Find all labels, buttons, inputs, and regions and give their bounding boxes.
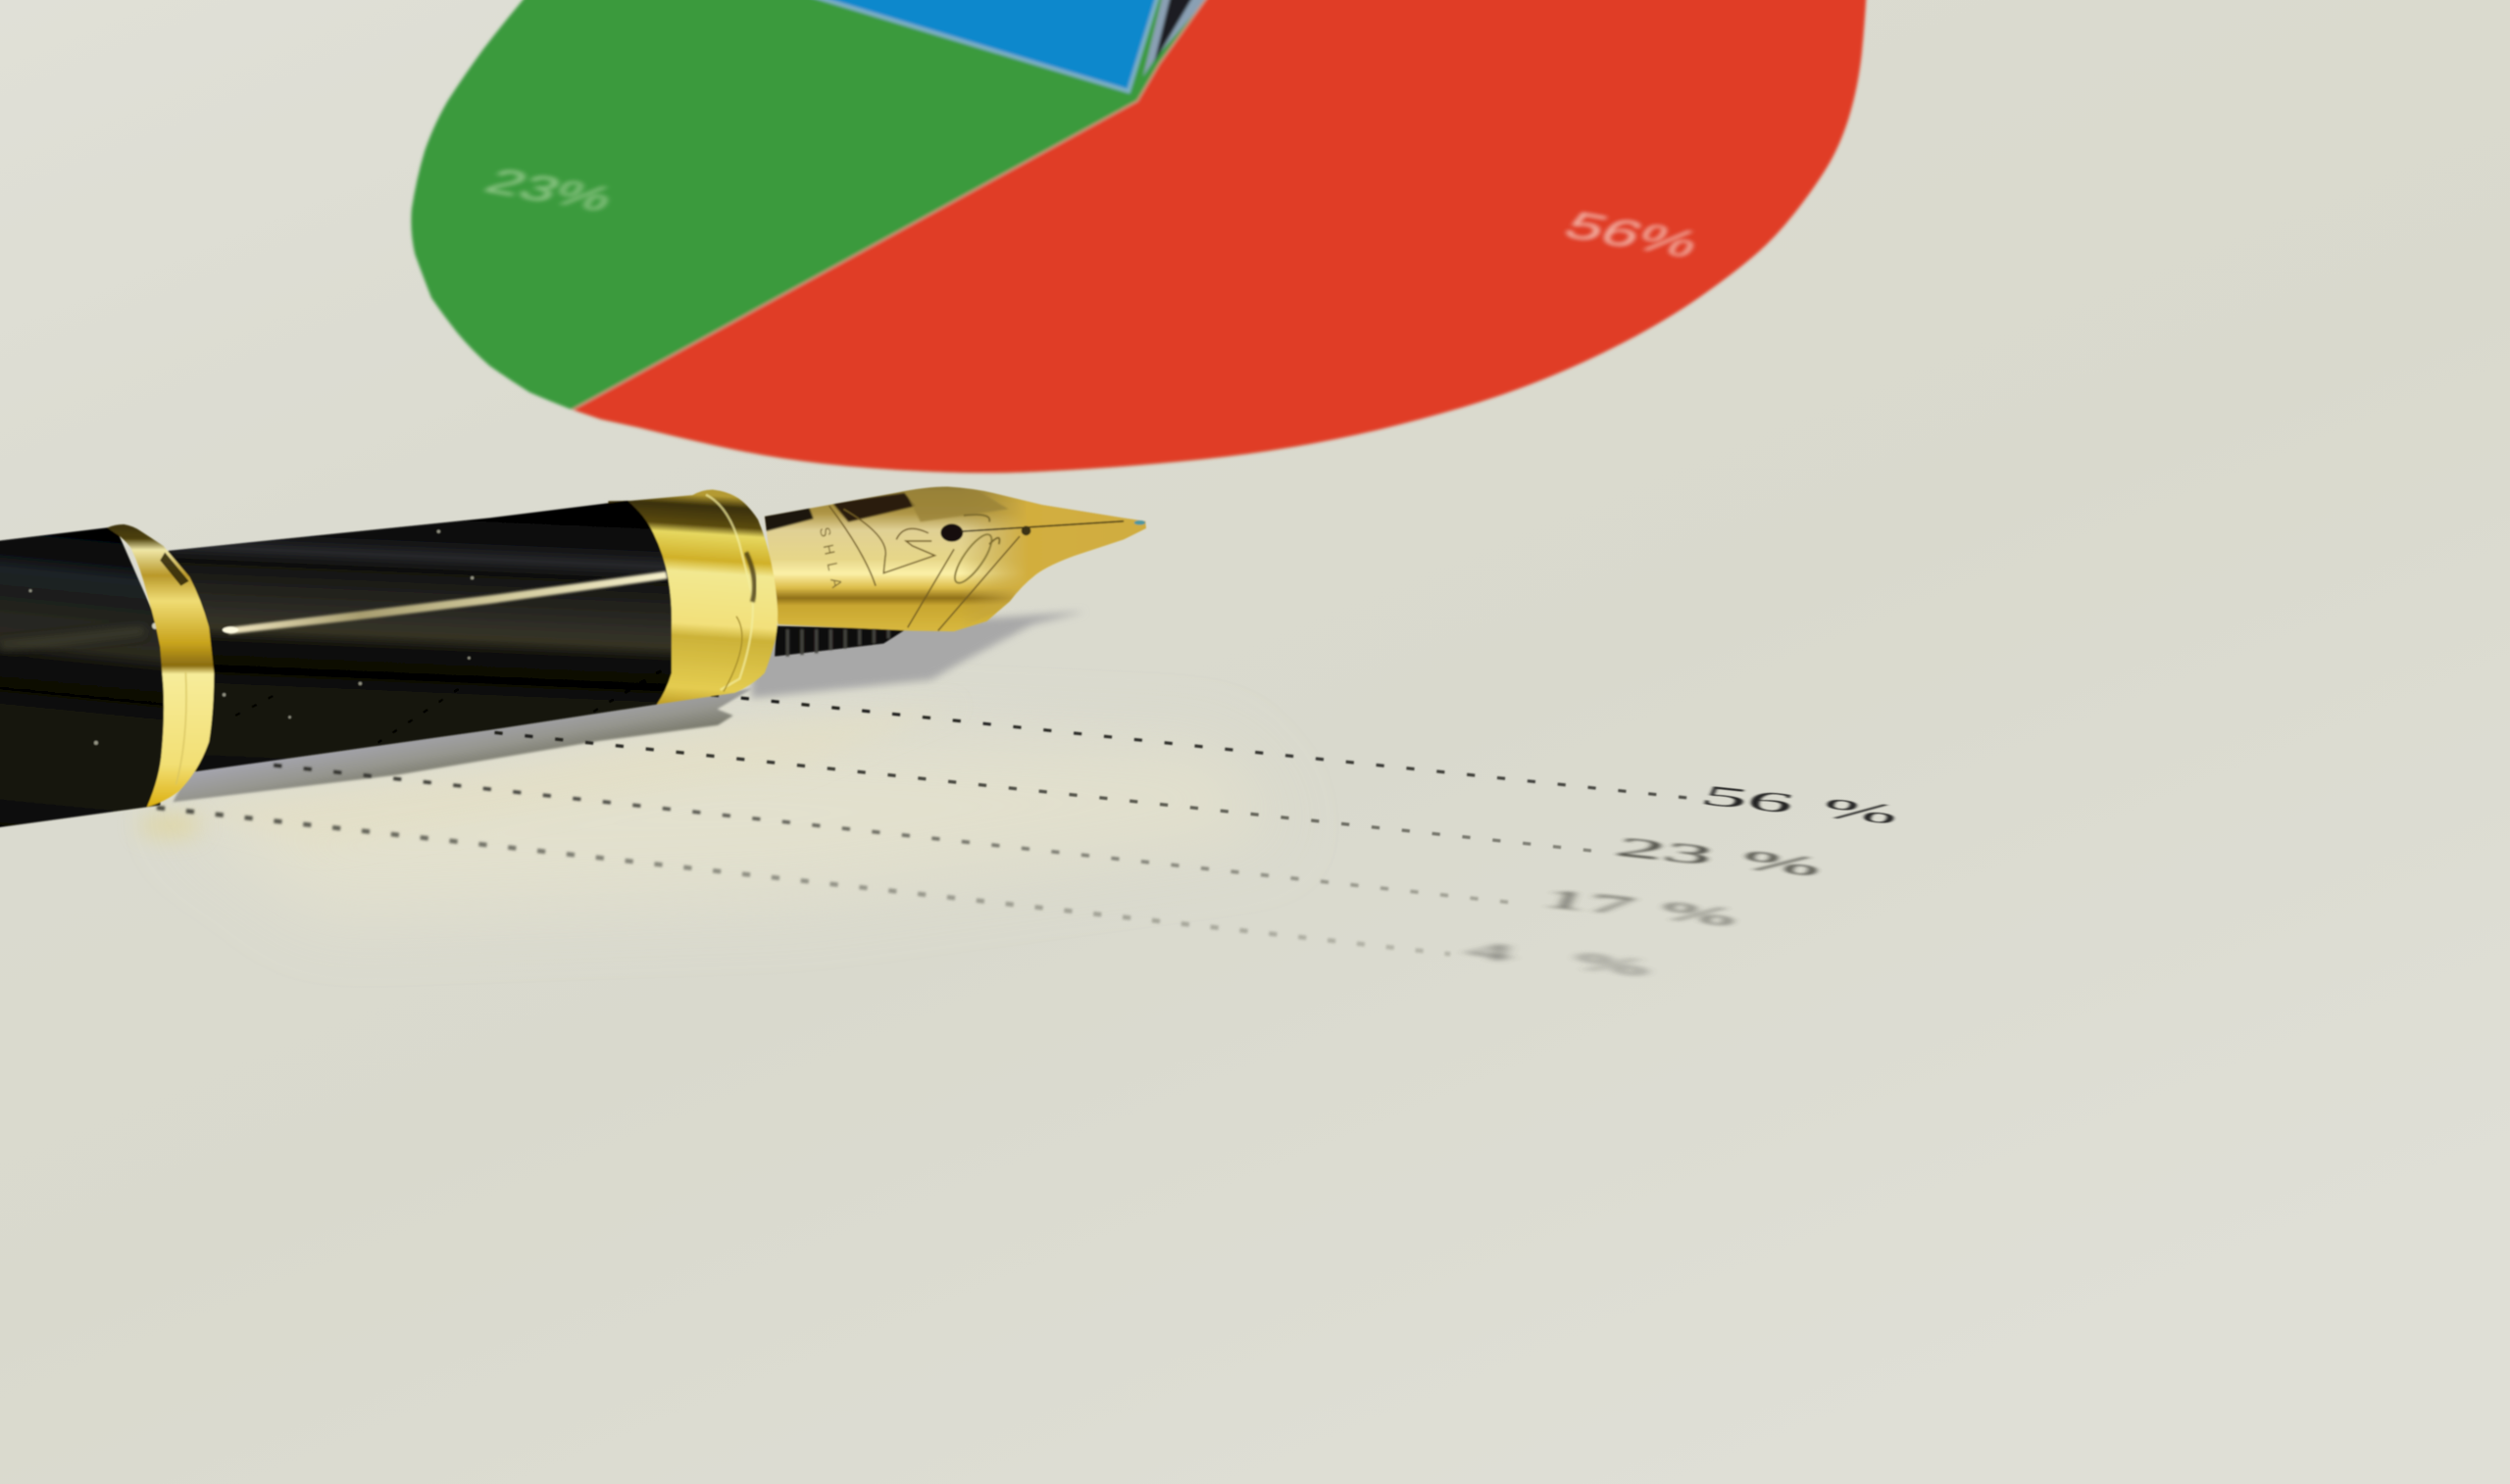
pen feed — [775, 626, 906, 657]
leader line: 56 % — [711, 695, 1697, 799]
pie slice: green 23% — [408, 0, 1193, 412]
front barrel — [168, 501, 672, 772]
pen nib — [752, 480, 1153, 631]
leader line: 17 % — [274, 766, 1514, 903]
leader line: 4 % — [157, 808, 1450, 954]
value label: 23 %: 23 % — [1611, 831, 1828, 882]
photo scene: pen on pie chart report — [0, 0, 1896, 978]
pie slice: black 4% — [1141, 0, 1207, 77]
barrel specks — [29, 530, 474, 745]
dark reflections on upper nib — [764, 492, 1008, 532]
barrel highlights — [0, 571, 668, 652]
nib imprint text: SHLA — [816, 525, 845, 597]
pie label: 23%: 23% — [477, 162, 623, 219]
right tip gold tone — [961, 491, 1147, 606]
value label: 56 %: 56 % — [1695, 780, 1905, 830]
gold collar — [608, 489, 778, 705]
value label: 4 %: 4 % — [1462, 936, 1655, 982]
pie slice: red 56% — [570, 0, 1869, 476]
pie label: 56%: 56% — [1556, 204, 1709, 266]
engraved logo lines — [829, 506, 1020, 630]
value label: 17 %: 17 % — [1537, 883, 1742, 932]
pie slice: blue 17% — [784, 0, 1161, 91]
pen shadow on paper — [173, 612, 1085, 802]
nib breather hole and slit — [940, 521, 1124, 542]
gold ring — [107, 524, 214, 807]
warm reflections on paper — [137, 705, 1280, 913]
leader line: 23 % — [494, 732, 1601, 852]
pie chart — [408, 0, 1869, 476]
rear barrel — [0, 526, 179, 827]
fountain pen — [0, 480, 1153, 827]
reflected dots on barrel — [235, 670, 661, 743]
